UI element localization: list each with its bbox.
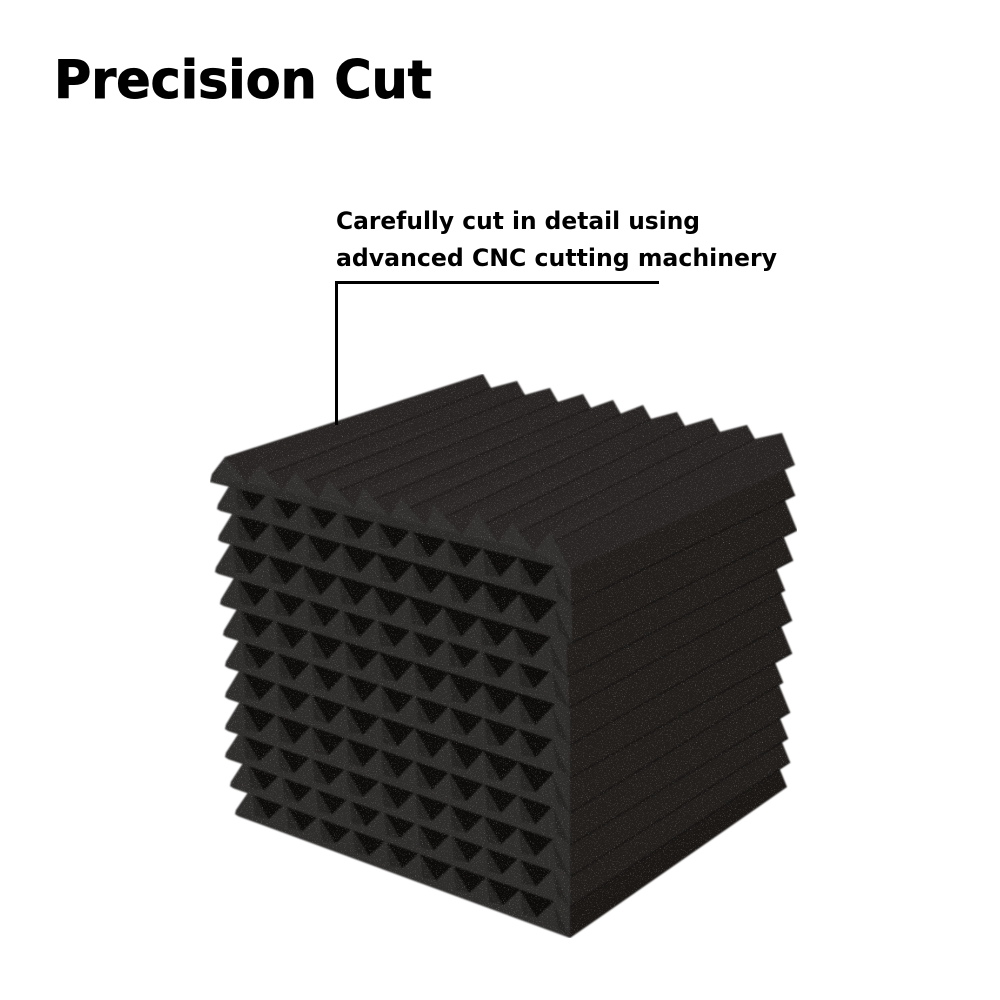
foam panel stack (210, 374, 797, 938)
callout text: advanced CNC cutting machinery (336, 244, 777, 272)
title: Precision Cut (54, 50, 432, 111)
foam layer 2 (217, 463, 795, 605)
callout text: Carefully cut in detail using (336, 207, 700, 235)
foam layer 12 (235, 755, 787, 938)
foam layer 3 (218, 498, 797, 643)
foam layer 11 (230, 730, 790, 907)
foam top layer (210, 374, 795, 570)
callout text (336, 207, 777, 272)
foam layer 10 (225, 706, 788, 877)
foam layer 8 (225, 650, 783, 813)
foam layer 9 (225, 680, 790, 845)
callout leader line (336, 282, 659, 425)
foam layer 4 (215, 528, 793, 677)
foam layer 5 (220, 558, 785, 708)
foam layer 6 (223, 588, 792, 745)
foam layer 7 (225, 621, 792, 778)
